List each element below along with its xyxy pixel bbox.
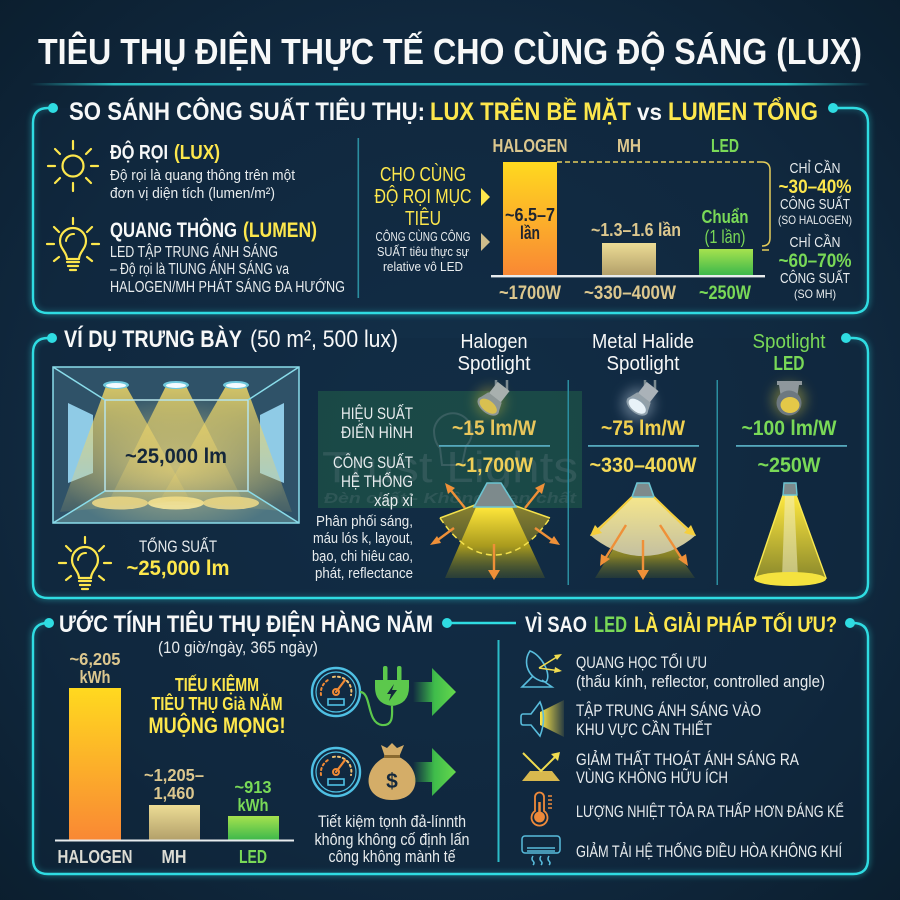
panel heading: LUX TRÊN BỀ MẶT: [430, 96, 631, 126]
text: luminous flux: HALOGEN/MH PHÁT SÁNG ĐA HƯỚNG: [110, 279, 345, 296]
column: metal halide: [588, 331, 699, 580]
heading: why LED: LED: [594, 612, 627, 637]
bar chart: power: ~330–400W: [584, 283, 676, 304]
text: row labels: phát, reflectance: [315, 565, 413, 582]
text: savings note: [314, 813, 470, 866]
text: savings callout: [778, 160, 852, 301]
icon: meter with money bag: $: [386, 770, 398, 793]
column: metal halide: Spotlight: [606, 353, 680, 375]
column: halogen: [430, 331, 560, 580]
bar chart: power: Chuẩn: [702, 207, 748, 227]
bar chart: power: lần: [520, 223, 540, 243]
bar chart: annual kWh: LED: [239, 847, 267, 867]
text: luminous flux: LED TẬP TRUNG ÁNH SÁNG: [110, 244, 278, 261]
bar chart: power: ~1700W: [499, 283, 561, 304]
heading: why LED: VÌ SAO: [525, 612, 587, 637]
bar chart: power: ~1.3–1.6 lần: [591, 220, 681, 240]
column: halogen: ~15 lm/W: [452, 417, 536, 440]
text: savings note: Tiết kiệm tọnh đả-línnth: [318, 813, 466, 831]
panel heading: (50 m², 500 lux): [250, 326, 398, 353]
callout: savings: MUỘNG MỌNG!: [148, 713, 286, 738]
panel: display example: [33, 325, 868, 598]
text: optics: [576, 652, 825, 691]
panel: power comparison: [33, 96, 868, 313]
panel heading: [64, 325, 398, 353]
LED beam diagram: [754, 483, 826, 586]
halogen beam diagram: [430, 483, 560, 580]
text: same target illuminance: relative vô LED: [383, 259, 463, 274]
icon: focused spotlight: [521, 700, 564, 737]
bar chart: annual kWh: MH: [162, 847, 186, 867]
text: losses: GIẢM THẤT THOÁT ÁNH SÁNG RA: [576, 750, 799, 769]
column: LED: ~100 lm/W: [742, 417, 837, 440]
bar chart: power: [491, 136, 770, 304]
subheading: (10 giờ/ngày, 365 ngày): [158, 638, 318, 657]
text: total lumens: TỔNG SUẤT: [139, 537, 217, 556]
panel heading: LUMEN TỔNG: [668, 96, 818, 126]
bar chart: annual kWh: ~6,205: [70, 649, 121, 669]
text: same target illuminance: [374, 163, 472, 274]
icon: reflection: [522, 752, 560, 781]
bar chart: power: LED: [711, 136, 739, 156]
text: savings note: không không cố định lấn: [314, 831, 470, 849]
callout: savings: [148, 674, 286, 738]
arrow: green: [413, 668, 456, 716]
text: same target illuminance: CÔNG CÙNG CÔNG: [376, 229, 470, 244]
panel heading: SO SÁNH CÔNG SUẤT TIÊU THỤ:: [69, 96, 425, 126]
text: savings callout: CÔNG SUẤT: [780, 196, 850, 213]
text: illuminance: ĐỘ RỌI: [110, 140, 168, 164]
callout: savings: TIẾU KIỆMM: [175, 674, 259, 695]
text: row labels: xấp xỉ: [374, 492, 413, 510]
room illustration: [53, 367, 299, 523]
column: halogen: ~1,700W: [455, 454, 533, 477]
text: total lumens: [126, 537, 230, 580]
heading: why LED: [525, 611, 837, 637]
callout: savings: TIÊU THỤ Già NĂM: [152, 693, 282, 714]
column: LED: LED: [774, 353, 804, 375]
arrow: tan: [481, 233, 490, 251]
bar chart: power: HALOGEN: [492, 136, 568, 156]
text: luminous flux: – Độ rọi là TIUNG ÁNH SÁNG va: [110, 261, 289, 278]
text: losses: VÙNG KHÔNG HỮU ÍCH: [576, 767, 728, 787]
text: focus: [576, 701, 761, 739]
panel heading: ƯỚC TÍNH TIÊU THỤ ĐIỆN HÀNG NĂM: [59, 610, 433, 638]
column: metal halide: Metal Halide: [592, 331, 694, 353]
text: savings callout: (SO MH): [794, 287, 836, 301]
metal halide beam diagram: [590, 483, 696, 580]
text: savings callout: (SO HALOGEN): [778, 213, 852, 227]
text: savings callout: ~30–40%: [778, 177, 852, 198]
icon: meter with money bag: [312, 743, 415, 800]
icon: air conditioner: [522, 836, 560, 865]
bar chart: annual kWh: 1,460: [154, 783, 195, 803]
text: row labels: máu lós k, layout,: [313, 530, 413, 547]
column: halogen: Spotlight: [458, 353, 531, 375]
text: focus: TẬP TRUNG ÁNH SÁNG VÀO: [576, 701, 761, 720]
bar chart: power: MH: [617, 136, 641, 156]
text: illuminance: (LUX): [174, 142, 220, 164]
watermark: Trust Lights: [322, 443, 578, 492]
icon: light bulb: [47, 218, 99, 270]
panel: annual consumption: [33, 610, 868, 874]
column: metal halide: ~75 lm/W: [601, 417, 685, 440]
icon: sun: [48, 141, 98, 191]
bar chart: power: (1 lần): [704, 227, 746, 247]
text: row labels: HỆ THỐNG: [341, 471, 413, 491]
text: savings callout: CÔNG SUẤT: [780, 270, 850, 287]
text: optics: (thấu kính, reflector, controlled angle): [576, 673, 825, 691]
text: row labels: Phân phối sáng,: [316, 513, 413, 530]
column: LED: ~250W: [758, 454, 821, 477]
text: optics: QUANG HỌC TỐI ƯU: [576, 652, 707, 672]
column: LED: [736, 331, 847, 586]
arrow: green: [413, 748, 456, 796]
text: savings callout: ~60–70%: [778, 251, 852, 272]
text: savings note: công không mành tế: [328, 848, 456, 866]
text: savings callout: CHỈ CẦN: [790, 234, 840, 251]
bar chart: annual kWh: HALOGEN: [58, 847, 132, 867]
bar chart: annual kWh: ~1,205–: [144, 765, 204, 785]
text: same target illuminance: SUẤT tiêu thực sự: [377, 244, 469, 259]
text: row labels: bạo, chi hiêu cao,: [312, 548, 413, 565]
watermark: Đèn chất - Không gian chất: [324, 490, 577, 507]
watermark: [318, 391, 582, 508]
panel heading: VÍ DỤ TRƯNG BÀY: [64, 325, 242, 353]
panel heading: [69, 96, 818, 126]
column: metal halide: ~330–400W: [590, 454, 697, 477]
text: luminous flux: [110, 218, 345, 296]
bar chart: annual kWh: [55, 649, 294, 867]
text: same target illuminance: ĐỘ RỌI MỤC: [374, 185, 472, 208]
text: savings callout: CHỈ CẦN: [790, 160, 840, 177]
text: luminous flux: QUANG THÔNG: [110, 218, 237, 242]
icon: optics dish: [522, 651, 562, 687]
text: same target illuminance: CHO CÙNG: [380, 163, 466, 186]
bar chart: annual kWh: kWh: [80, 667, 110, 687]
icon: thermometer: [532, 792, 552, 826]
bar chart: annual kWh: kWh: [238, 795, 268, 815]
column: LED: Spotlight: [752, 331, 826, 353]
heading: why LED: LÀ GIẢI PHÁP TỐI ƯU?: [634, 611, 837, 637]
text: row labels: HIỆU SUẤT: [341, 404, 413, 423]
text: illuminance: Độ rọi là quang thông trên một: [110, 167, 296, 184]
bar chart: power: ~250W: [699, 283, 751, 304]
room illustration: ~25,000 lm: [125, 445, 227, 468]
icon: light bulb: [59, 537, 111, 589]
text: luminous flux: (LUMEN): [243, 219, 317, 242]
text: focus: KHU VỰC CẦN THIẾT: [576, 720, 712, 739]
text: row labels: ĐIỂN HÌNH: [341, 423, 413, 442]
bar chart: annual kWh: ~913: [234, 777, 272, 797]
text: illuminance: đơn vị diện tích (lumen/m²): [110, 185, 275, 202]
column: halogen: Halogen: [460, 331, 528, 353]
text: illuminance: [110, 140, 296, 202]
text: row labels: CÔNG SUẤT: [333, 453, 413, 472]
panel heading: vs: [637, 99, 662, 125]
text: losses: [576, 750, 799, 787]
bar chart: power: ~6.5–7: [505, 205, 555, 225]
text: row labels: [312, 404, 413, 582]
text: total lumens: ~25,000 lm: [126, 557, 230, 580]
arrow: yellow: [481, 188, 490, 206]
icon: meter with plug: [312, 666, 409, 725]
text: same target illuminance: TIÊU: [405, 207, 441, 230]
